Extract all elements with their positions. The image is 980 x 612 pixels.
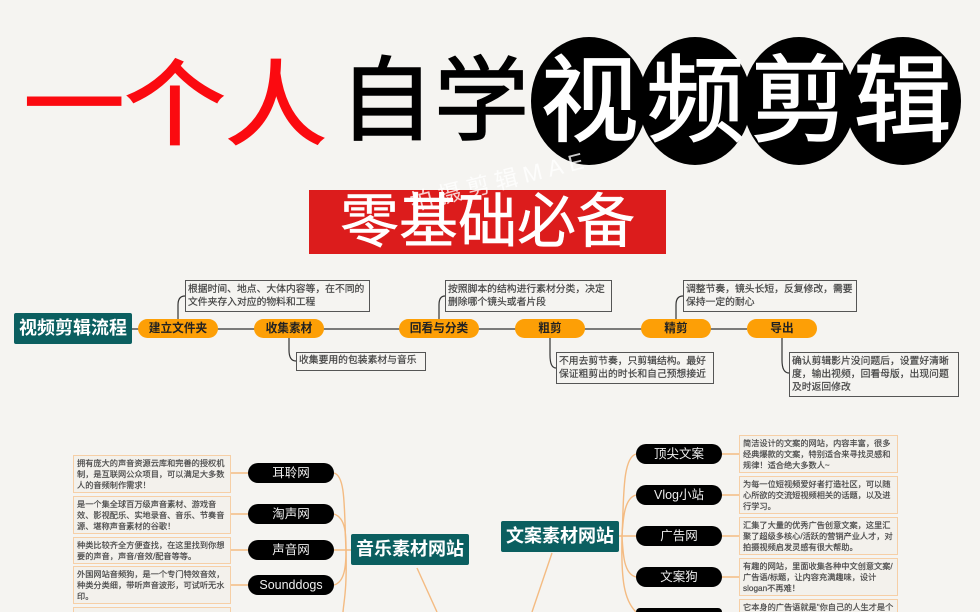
description: Sounddogs xyxy=(73,566,231,604)
description: 广告网 xyxy=(739,517,898,555)
note: 导出: 度，输出视频，回看母版，出现问题 xyxy=(792,369,949,380)
site: 耳聆网: 耳聆网 xyxy=(272,466,310,480)
description: 广告网: 拍摄视频启发灵感有很大帮助。 xyxy=(743,543,858,552)
description: 声音网: 种类比较齐全方便查找，在这里找到你想 xyxy=(77,541,224,550)
title part: white 视频剪辑 on black circles: 频 xyxy=(646,48,744,154)
note: 精剪: 保持一定的耐心 xyxy=(686,297,755,308)
description: cropped fifth entry xyxy=(73,607,231,612)
site: 声音网 xyxy=(248,540,334,560)
title part: black 自学: 自学 xyxy=(339,51,529,153)
title part: white 视频剪辑 on black circles: 剪 xyxy=(750,48,848,154)
heading: 音乐素材网站 xyxy=(351,534,469,565)
description: 淘声网: 源、堪称声音素材的谷歌！ xyxy=(77,522,175,531)
description: 顶尖文案: 经典爆款的文案，特别适合来寻找灵感和 xyxy=(743,450,890,459)
description: cropped fifth entry xyxy=(739,599,898,612)
step: 回看与分类: 回看与分类 xyxy=(410,322,468,335)
site: 顶尖文案 xyxy=(636,444,722,464)
description: Vlog小站 xyxy=(739,476,898,514)
panel: editing workflow xyxy=(14,280,959,397)
heading: 音乐素材网站: 音乐素材网站 xyxy=(356,539,464,559)
heading: 文案素材网站: 文案素材网站 xyxy=(506,526,614,546)
description: Sounddogs: 种类分类细，带听声音波形，可试听无水 xyxy=(77,581,224,590)
title part: red 一个人: 一个人 xyxy=(23,55,326,158)
site: Sounddogs: Sounddogs xyxy=(259,578,323,592)
description: Vlog小站: 行学习。 xyxy=(743,502,776,511)
site: Vlog小站: Vlog小站 xyxy=(654,488,704,502)
watermark: 拍摄剪辑MAE xyxy=(408,146,592,216)
note: 建立文件夹: 文件夹存入对应的物料和工程 xyxy=(188,297,315,308)
site: 文案狗 xyxy=(636,567,722,587)
description: 声音网: 要的声音，声音/音效/配音等等。 xyxy=(77,552,196,561)
step: 建立文件夹: 建立文件夹 xyxy=(149,322,207,335)
note: 回看与分类: 按照脚本的结构进行素材分类，决定 xyxy=(448,284,605,295)
step: 回看与分类 xyxy=(399,319,479,338)
description: 广告网: 聚了超级多核心/活跃的营销产业人才，对 xyxy=(743,532,893,541)
panel: music resources xyxy=(73,455,469,612)
title part: white 视频剪辑 on black circles xyxy=(531,37,961,165)
note: 收集素材 xyxy=(296,352,426,371)
site: 声音网: 声音网 xyxy=(272,543,310,557)
site: 广告网: 广告网 xyxy=(660,529,698,543)
description: 顶尖文案: 简洁设计的文案的网站，内容丰富，很多 xyxy=(743,439,890,448)
note: 粗剪: 保证粗剪出的时长和自己预想接近 xyxy=(559,369,706,380)
site: 广告网 xyxy=(636,526,722,546)
step: 导出: 导出 xyxy=(770,322,794,335)
note: 粗剪 xyxy=(556,352,714,384)
description: 耳聆网: 人的音频制作需求！ xyxy=(77,481,151,490)
site: 淘声网 xyxy=(248,504,334,524)
step: 精剪 xyxy=(641,319,711,338)
title: 一个人自学视频剪辑 xyxy=(23,37,961,165)
description: 耳聆网: 拥有庞大的声音资源云库和完善的授权机 xyxy=(77,459,224,468)
note: 导出: 及时返回修改 xyxy=(792,382,851,393)
description: Sounddogs: 外国网站音频狗，是一个专门特效音效， xyxy=(77,570,224,579)
step: 建立文件夹 xyxy=(138,319,218,338)
step: 收集素材: 收集素材 xyxy=(266,322,312,335)
site: 淘声网: 淘声网 xyxy=(272,507,310,521)
note: 导出: 确认剪辑影片没问题后，设置好清晰 xyxy=(792,356,949,367)
site: cropped fifth entry xyxy=(636,608,722,612)
site: Vlog小站 xyxy=(636,485,722,505)
description: Sounddogs: 印。 xyxy=(77,592,93,601)
step: 粗剪: 粗剪 xyxy=(538,322,562,335)
site: 顶尖文案: 顶尖文案 xyxy=(654,447,704,461)
description: Vlog小站: 心所欲的交流短视频相关的话题，以及进 xyxy=(743,491,890,500)
site: Sounddogs xyxy=(248,575,334,595)
description: 文案狗: 广告语/标题，让内容充满趣味，设计 xyxy=(743,573,876,582)
description: 淘声网 xyxy=(73,496,231,534)
site: 耳聆网 xyxy=(248,463,334,483)
note: 回看与分类 xyxy=(445,280,612,312)
note: 建立文件夹: 根据时间、地点、大体内容等，在不同的 xyxy=(188,284,364,295)
description: Vlog小站: 为每一位短视频爱好者打造社区，可以随 xyxy=(743,480,890,489)
description: 耳聆网 xyxy=(73,455,231,493)
step: 收集素材 xyxy=(254,319,324,338)
panel: copywriting resources xyxy=(501,435,898,612)
note: 建立文件夹 xyxy=(185,280,370,312)
step: 精剪: 精剪 xyxy=(664,322,688,335)
description: 文案狗: slogan不再难！ xyxy=(743,584,800,593)
description: 淘声网: 是一个集全球百万级声音素材、游戏音 xyxy=(77,500,216,509)
heading: 视频剪辑流程 xyxy=(14,313,132,344)
title part: white 视频剪辑 on black circles: 视 xyxy=(540,48,638,154)
description: cropped fifth entry: 它本身的广告语就是"你自己的人生才是个 xyxy=(743,603,893,612)
description: 耳聆网: 制，是互联网公众项目，可以满足大多数 xyxy=(77,470,224,479)
note: 导出 xyxy=(789,352,959,397)
description: 淘声网: 效、影视配乐、实地录音、音乐、节奏音 xyxy=(77,511,224,520)
description: 文案狗: 有趣的网站，里面收集各种中文创意文案/ xyxy=(743,562,893,571)
note: 粗剪: 不用去剪节奏，只剪辑结构。最好 xyxy=(559,356,706,367)
note: 收集素材: 收集要用的包装素材与音乐 xyxy=(299,355,417,366)
description: 声音网 xyxy=(73,537,231,564)
description: 顶尖文案: 规律！适合绝大多数人~ xyxy=(743,461,830,470)
subtitle banner: 零基础必备: 零基础必备 xyxy=(340,189,635,255)
note: 精剪: 调整节奏，镜头长短，反复修改，需要 xyxy=(686,284,853,295)
heading: 文案素材网站 xyxy=(501,521,619,552)
description: 广告网: 汇集了大量的优秀广告创意文案，这里汇 xyxy=(743,521,890,530)
site: 文案狗: 文案狗 xyxy=(660,570,698,584)
note: 回看与分类: 删除哪个镜头或者片段 xyxy=(448,297,546,308)
heading: 视频剪辑流程: 视频剪辑流程 xyxy=(19,318,127,338)
description: 文案狗 xyxy=(739,558,898,596)
step: 粗剪 xyxy=(515,319,585,338)
note: 精剪 xyxy=(683,280,857,312)
description: 顶尖文案 xyxy=(739,435,898,473)
title part: white 视频剪辑 on black circles: 辑 xyxy=(853,48,952,154)
step: 导出 xyxy=(747,319,817,338)
